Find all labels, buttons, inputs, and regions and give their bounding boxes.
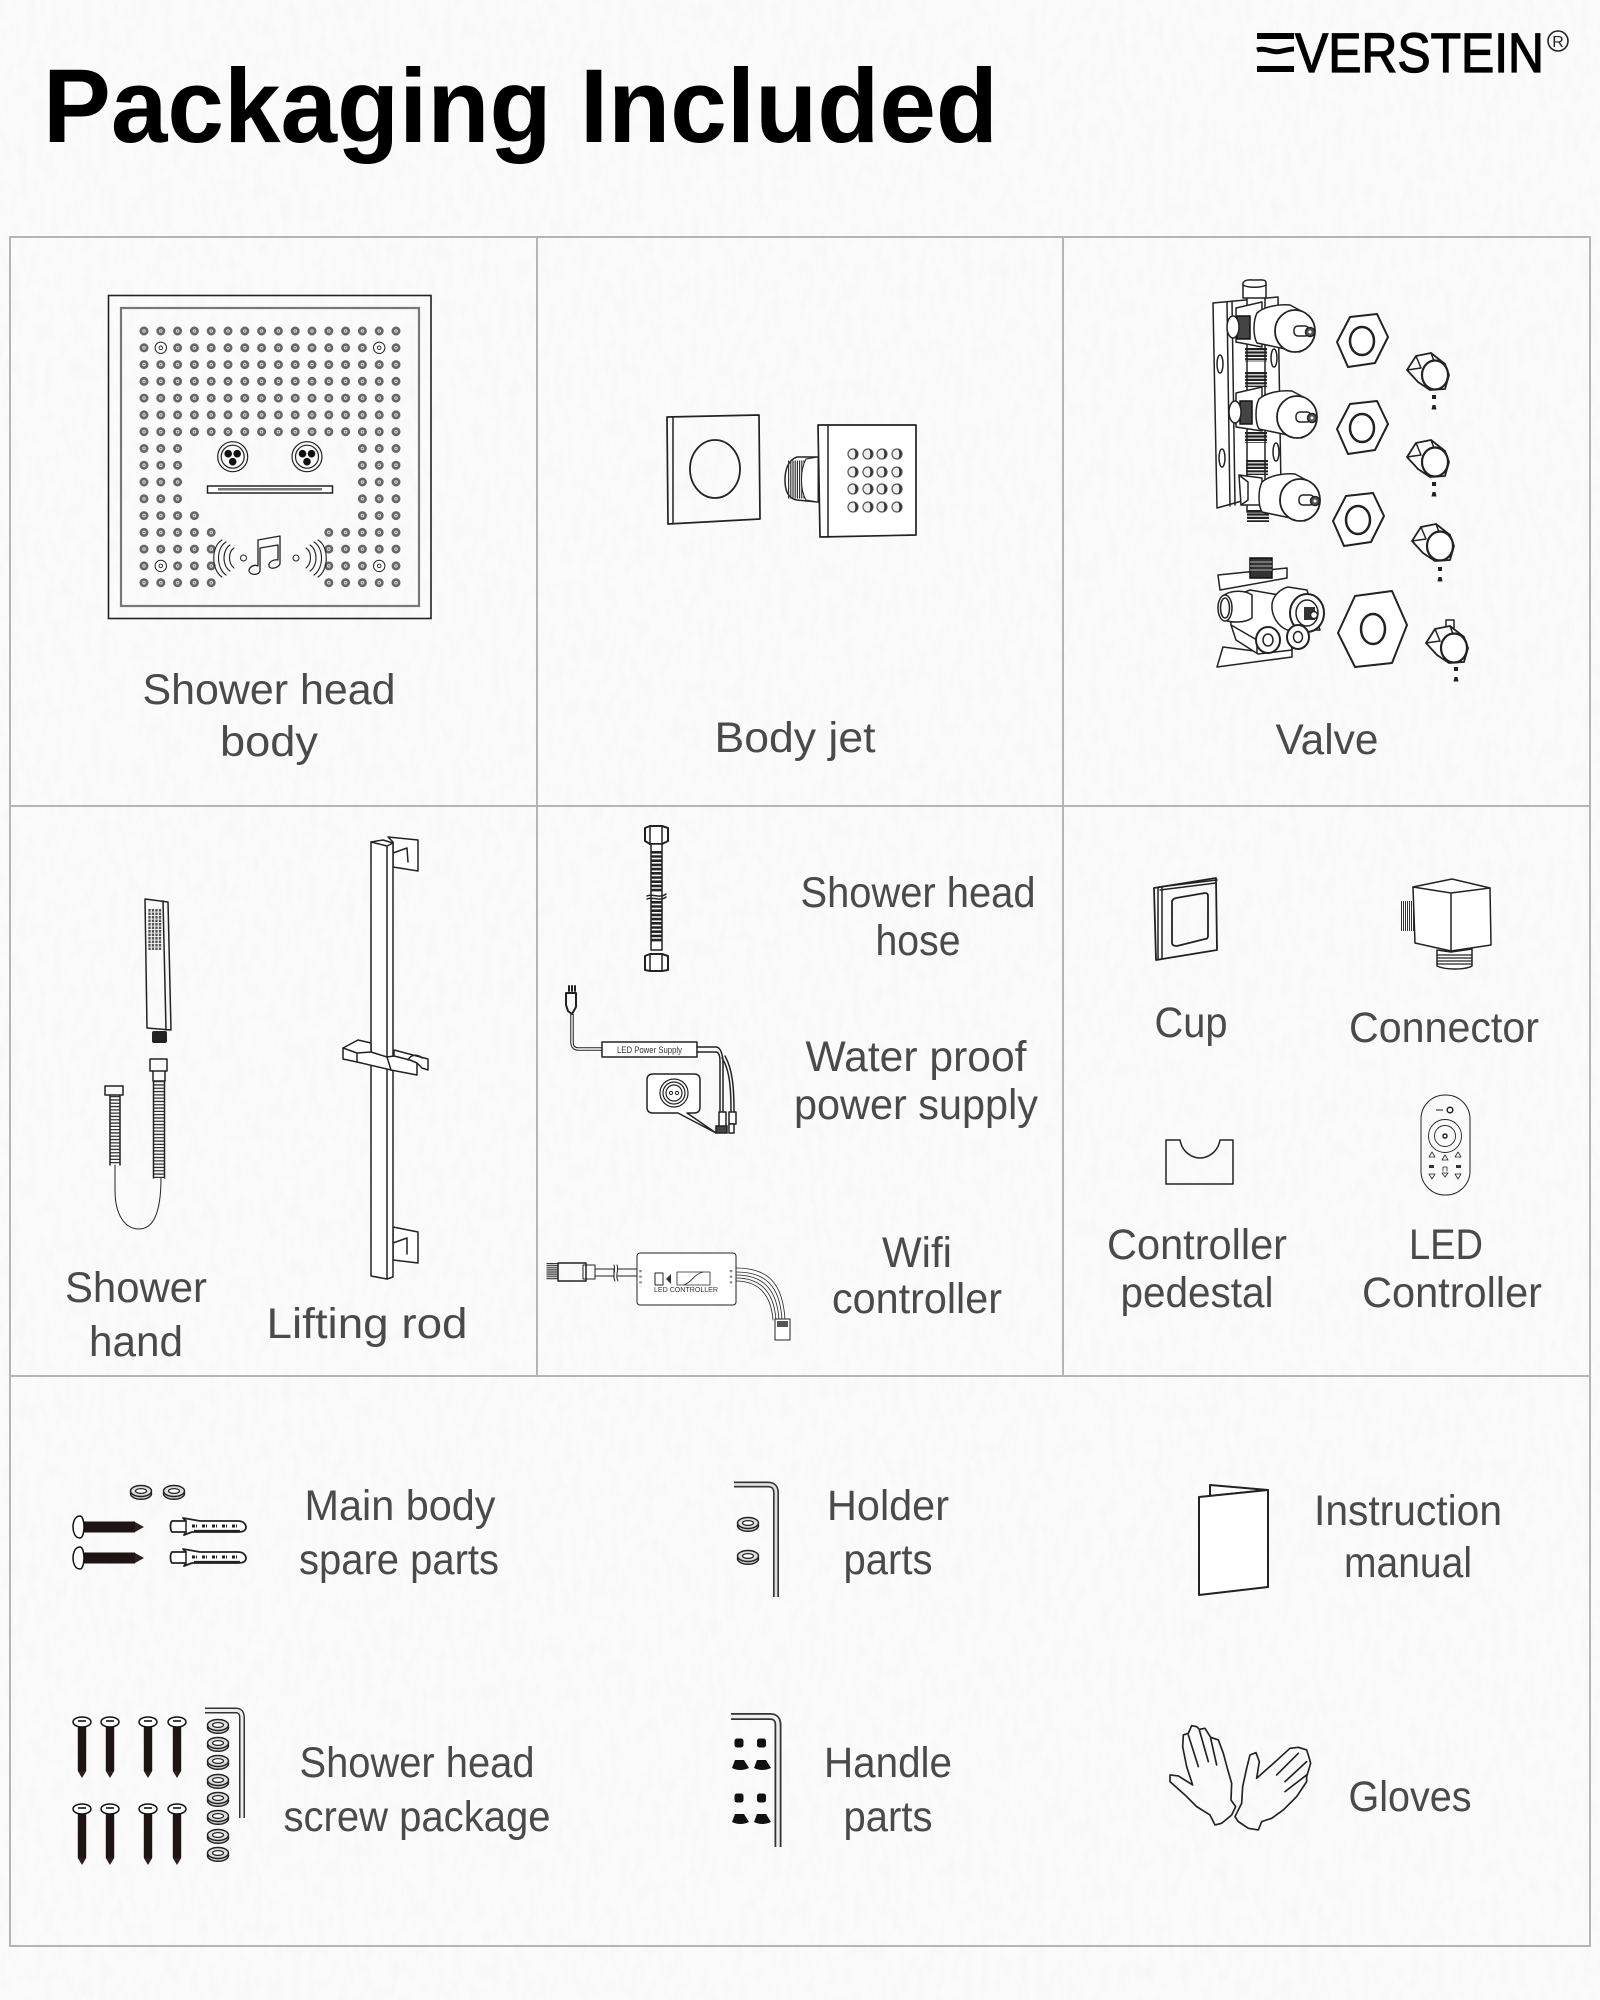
- icon: lifting rod: [343, 837, 428, 1279]
- icon: LED power supply: [566, 986, 736, 1133]
- label: [827, 1482, 949, 1584]
- label: screw package: [284, 1793, 550, 1841]
- label: manual: [1344, 1539, 1472, 1587]
- icon: shower head: [108, 296, 431, 618]
- label: Controller: [1362, 1269, 1542, 1317]
- label: Handle: [824, 1739, 952, 1787]
- icon: LED remote controller: [1421, 1095, 1470, 1195]
- label: [1362, 1221, 1542, 1317]
- label: [800, 869, 1036, 965]
- panel: spare parts and accessories: [10, 1376, 1590, 1946]
- label: Cup: [1154, 999, 1228, 1047]
- icon: main body spare parts: [73, 1486, 246, 1569]
- label: [794, 1033, 1038, 1129]
- label: parts: [844, 1536, 932, 1584]
- label: Instruction: [1314, 1487, 1502, 1535]
- icon: body jet: [667, 415, 916, 537]
- panel: body jet: [537, 237, 1063, 806]
- label: Shower: [65, 1264, 207, 1312]
- icon: valve: [1213, 280, 1468, 682]
- label: Shower head: [800, 869, 1036, 917]
- label: power supply: [794, 1081, 1038, 1129]
- icon: shower head hose: [645, 826, 668, 971]
- label: hose: [876, 917, 960, 965]
- label: controller: [832, 1275, 1002, 1323]
- icon: gloves: [1170, 1726, 1311, 1830]
- label: [142, 666, 396, 766]
- label: pedestal: [1120, 1269, 1274, 1317]
- label: Holder: [827, 1482, 949, 1530]
- bottom valve: [1217, 558, 1324, 667]
- brand logo: VERSTEIN: [1295, 21, 1544, 84]
- label: Lifting rod: [266, 1300, 468, 1348]
- icon: LED power supply: LED Power Supply: [617, 1045, 682, 1055]
- panel: valve: [1063, 237, 1590, 806]
- label: parts: [844, 1793, 932, 1841]
- label: [299, 1482, 499, 1584]
- icon: connector: [1401, 879, 1491, 969]
- label: spare parts: [299, 1536, 499, 1584]
- label: Shower head: [142, 666, 396, 714]
- label: Wifi: [882, 1229, 952, 1277]
- icon: wifi controller: LED CONTROLLER: [654, 1287, 718, 1294]
- label: [1314, 1487, 1502, 1587]
- label: Connector: [1349, 1004, 1539, 1052]
- panel: cup, connector, pedestal, LED controller: [1063, 806, 1590, 1376]
- panel: shower head body: [10, 237, 537, 806]
- icon: shower head screw package: [73, 1710, 242, 1865]
- icon: instruction manual: [1199, 1485, 1268, 1595]
- label: [832, 1229, 1002, 1323]
- icon: cup: [1154, 878, 1217, 960]
- label: [65, 1264, 207, 1366]
- brand logo: R: [1552, 34, 1564, 51]
- label: Shower head: [300, 1739, 534, 1787]
- icon: shower hand: [105, 899, 171, 1229]
- icon: wifi controller: [552, 1253, 790, 1340]
- title: Packaging Included: [43, 48, 998, 165]
- label: Water proof: [806, 1033, 1028, 1081]
- label: Controller: [1107, 1221, 1287, 1269]
- label: Gloves: [1348, 1773, 1472, 1821]
- label: [1107, 1221, 1287, 1317]
- label: Main body: [304, 1482, 496, 1530]
- icon: controller pedestal: [1166, 1140, 1233, 1184]
- label: Valve: [1276, 716, 1378, 764]
- label: LED: [1409, 1221, 1483, 1269]
- label: body: [220, 718, 319, 766]
- panel: shower hand and lifting rod: [10, 806, 537, 1376]
- icon: handle parts: [731, 1716, 778, 1847]
- icon: holder parts: [734, 1484, 776, 1597]
- label: Body jet: [714, 714, 876, 762]
- label: hand: [89, 1318, 183, 1366]
- label: [824, 1739, 952, 1841]
- label: [284, 1739, 550, 1841]
- panel: hose, power supply, wifi controller: [537, 806, 1063, 1376]
